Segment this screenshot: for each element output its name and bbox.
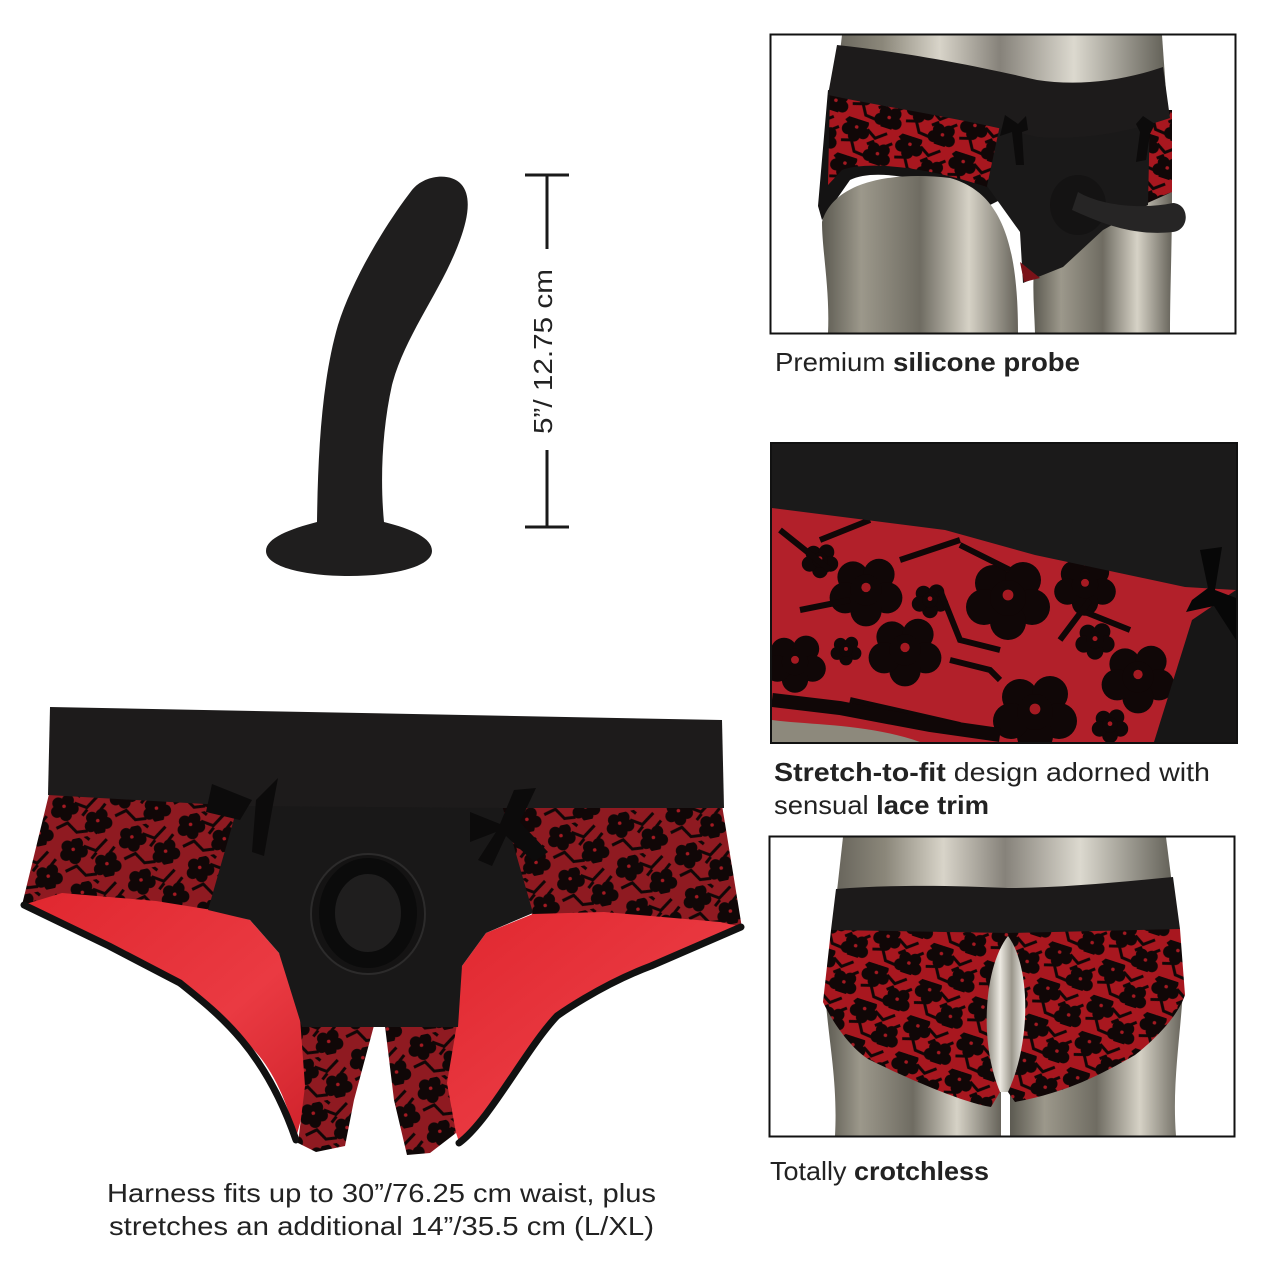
- panel: silicone probe: [770, 34, 1236, 377]
- left side lace: [22, 790, 240, 915]
- panel: lace trim: [764, 443, 1237, 820]
- right satin lining: [440, 912, 738, 1142]
- caption: Totally crotchless: [770, 1156, 989, 1186]
- left satin lining: [26, 893, 310, 1138]
- o-ring: [311, 854, 425, 974]
- waistband: [48, 707, 724, 808]
- caption: Premium silicone probe: [775, 347, 1080, 377]
- front panel: [208, 805, 533, 1027]
- dimension label: 5”/ 12.75 cm: [528, 269, 558, 434]
- silicone probe illustration: [266, 177, 468, 576]
- bows: [206, 778, 278, 856]
- harness caption: [107, 1178, 656, 1241]
- panel: crotchless: [770, 836, 1234, 1186]
- right side lace: [500, 805, 742, 928]
- caption: Stretch-to-fit design adorned with: [774, 757, 1210, 787]
- panel: lace trim: sensual lace trim: [774, 790, 989, 820]
- harness caption: stretches an additional 14”/35.5 cm (L/XL): [109, 1211, 654, 1241]
- harness caption: Harness fits up to 30”/76.25 cm waist, plus: [107, 1178, 656, 1208]
- harness product photo: [22, 707, 742, 1155]
- crotch lace strips: [298, 1018, 376, 1152]
- dimension marker: [525, 175, 569, 527]
- black leg hems: [24, 905, 741, 1143]
